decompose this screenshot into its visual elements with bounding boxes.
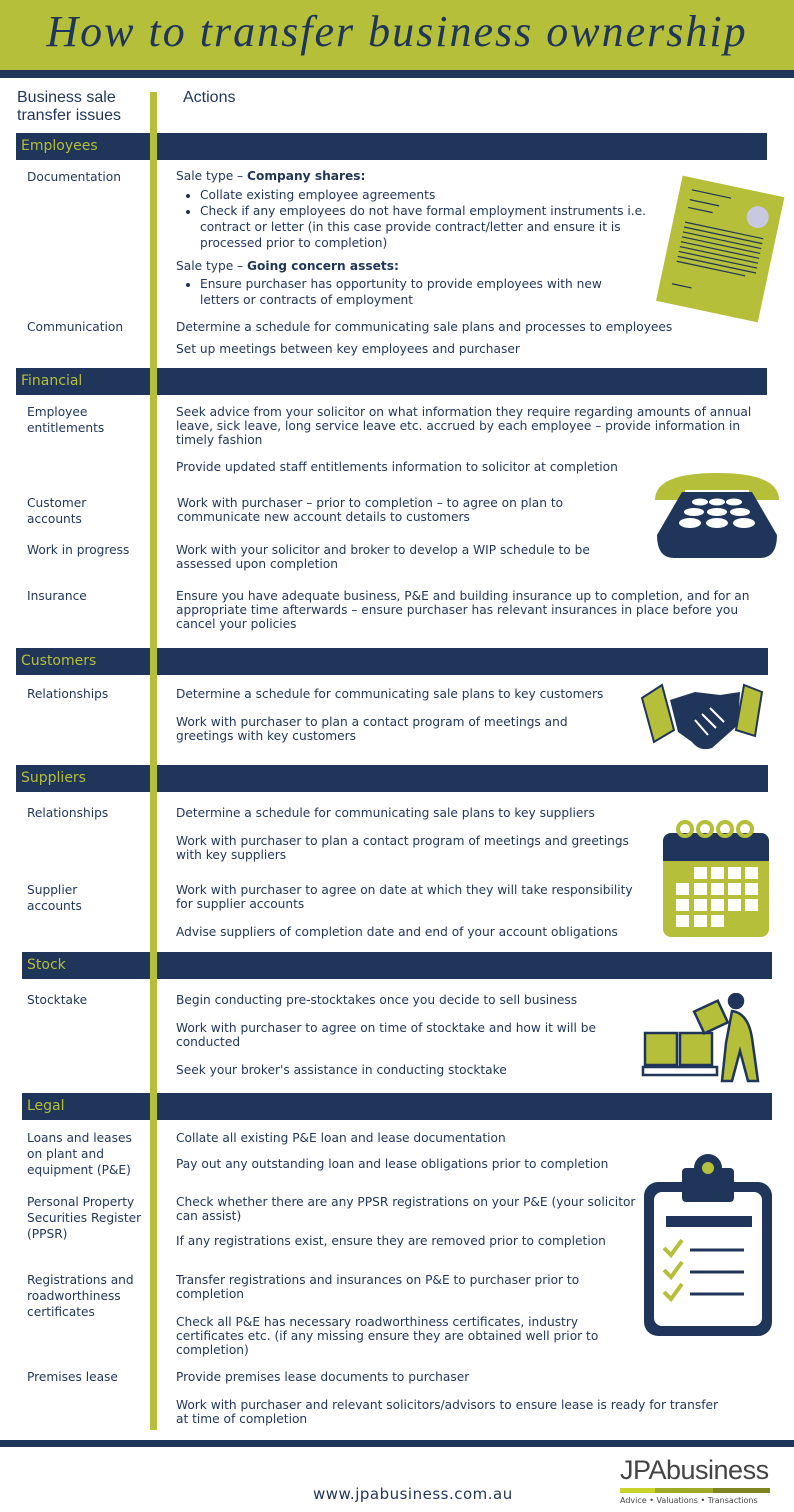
legal content: on plant and <box>27 1147 104 1161</box>
text: Communication <box>27 320 123 334</box>
text: Insurance <box>27 589 87 603</box>
text: Suppliers <box>21 770 86 786</box>
text: Determine a schedule for communicating sale plans to key suppliers <box>176 806 595 820</box>
logo: Advice • Valuations • Transactions <box>620 1496 758 1505</box>
financial content <box>27 405 104 435</box>
text: Determine a schedule for communicating sale plans and processes to employees <box>176 320 672 334</box>
text: Customer <box>27 496 86 510</box>
text: Ensure you have adequate business, P&E and building insurance up to completion, and for an <box>176 589 750 603</box>
text: cancel your policies <box>176 617 297 631</box>
text: appropriate time afterwards – ensure purchaser has relevant insurances in place before you <box>176 603 738 617</box>
text: greetings with key customers <box>176 729 356 743</box>
legal content <box>27 1131 132 1177</box>
text: letters or contracts of employment <box>200 293 413 307</box>
text: contract or letter (in this case provide contract/letter and ensure it is <box>200 220 621 234</box>
vertical divider <box>150 92 157 1430</box>
text: Personal Property <box>27 1195 134 1209</box>
text: Registrations and <box>27 1273 134 1287</box>
text: Work with purchaser to plan a contact program of meetings and greetings <box>176 834 629 848</box>
logo <box>620 1455 770 1505</box>
text: Provide premises lease documents to purchaser <box>176 1370 469 1384</box>
text: completion <box>176 1287 244 1301</box>
text: Securities Register <box>27 1211 141 1225</box>
text: If any registrations exist, ensure they are removed prior to completion <box>176 1234 606 1248</box>
text: Work in progress <box>27 543 129 557</box>
suppliers content: Relationships <box>27 806 108 820</box>
text: can assist) <box>176 1209 241 1223</box>
title: How to transfer business ownership <box>46 7 748 56</box>
text: certificates etc. (if any missing ensure they are obtained well prior to <box>176 1329 598 1343</box>
text: conducted <box>176 1035 240 1049</box>
text: Pay out any outstanding loan and lease obligations prior to completion <box>176 1157 608 1171</box>
text: assessed upon completion <box>176 557 338 571</box>
text: Sale type – Company shares: <box>176 169 365 183</box>
stock content: Stocktake <box>27 993 87 1007</box>
text: Seek your broker's assistance in conducting stocktake <box>176 1063 507 1077</box>
icon: handshake <box>640 683 764 750</box>
footer bar <box>0 1440 794 1447</box>
text: Check all P&E has necessary roadworthiness certificates, industry <box>176 1315 578 1329</box>
column heading: issues: transfer issues <box>17 107 121 124</box>
header <box>0 0 794 70</box>
text: Set up meetings between key employees and purchaser <box>176 342 520 356</box>
column heading: issues <box>17 89 121 124</box>
customers content: Relationships <box>27 687 108 701</box>
text: Transfer registrations and insurances on P&E to purchaser prior to <box>176 1273 579 1287</box>
legal content: Loans and leases <box>27 1131 132 1145</box>
text: Work with purchaser to plan a contact program of meetings and <box>176 715 568 729</box>
section bars <box>16 133 767 160</box>
text: Work with purchaser and relevant solicitors/advisors to ensure lease is ready for transfer <box>176 1398 718 1412</box>
text: Determine a schedule for communicating sale plans to key customers <box>176 687 603 701</box>
text: Work with purchaser to agree on date at which they will take responsibility <box>176 883 633 897</box>
column heading: actions: Actions <box>183 89 235 106</box>
text: Provide updated staff entitlements information to solicitor at completion <box>176 460 618 474</box>
text: Stock <box>27 957 66 973</box>
text: Premises lease <box>27 1370 118 1384</box>
text: accounts <box>27 512 82 526</box>
text: processed prior to completion) <box>200 236 387 250</box>
text: for supplier accounts <box>176 897 304 911</box>
section bars: Employees <box>21 138 98 154</box>
icon: phone <box>655 473 779 558</box>
text: certificates <box>27 1305 95 1319</box>
text: Legal <box>27 1098 65 1114</box>
text: Ensure purchaser has opportunity to provide employees with new <box>200 277 602 291</box>
column heading: issues: Business sale <box>17 89 116 106</box>
text: Collate existing employee agreements <box>200 188 435 202</box>
logo: JPAbusiness <box>620 1455 769 1485</box>
text: Supplier <box>27 883 77 897</box>
icon: stock worker <box>642 993 760 1082</box>
text: Work with your solicitor and broker to develop a WIP schedule to be <box>176 543 590 557</box>
text: timely fashion <box>176 433 262 447</box>
icon: document <box>656 176 784 322</box>
text: Begin conducting pre-stocktakes once you decide to sell business <box>176 993 577 1007</box>
text: Check if any employees do not have formal employment instruments i.e. <box>200 204 646 218</box>
text: communicate new account details to customers <box>177 510 470 524</box>
financial content: entitlements <box>27 421 104 435</box>
text: Check whether there are any PPSR registrations on your P&E (your solicitor <box>176 1195 635 1209</box>
text: Financial <box>21 373 82 389</box>
text: (PPSR) <box>27 1227 67 1241</box>
text: Sale type – Going concern assets: <box>176 259 399 273</box>
text: with key suppliers <box>176 848 286 862</box>
legal content: equipment (P&E) <box>27 1163 131 1177</box>
website url: www.jpabusiness.com.au <box>313 1485 513 1503</box>
icon: clipboard <box>644 1154 772 1336</box>
employees content: Documentation <box>27 170 121 184</box>
text: leave, sick leave, long service leave etc. accrued by each employee – provide information in <box>176 419 740 433</box>
text: Seek advice from your solicitor on what information they require regarding amounts of annual <box>176 405 751 419</box>
text: accounts <box>27 899 82 913</box>
text: Collate all existing P&E loan and lease documentation <box>176 1131 506 1145</box>
text: completion) <box>176 1343 249 1357</box>
text: Work with purchaser to agree on time of stocktake and how it will be <box>176 1021 596 1035</box>
icon: calendar <box>663 820 769 937</box>
financial content: Employee <box>27 405 87 419</box>
text: Customers <box>21 653 96 669</box>
text: roadworthiness <box>27 1289 121 1303</box>
text: Work with purchaser – prior to completion – to agree on plan to <box>177 496 563 510</box>
text: Advise suppliers of completion date and end of your account obligations <box>176 925 618 939</box>
text: at time of completion <box>176 1412 307 1426</box>
